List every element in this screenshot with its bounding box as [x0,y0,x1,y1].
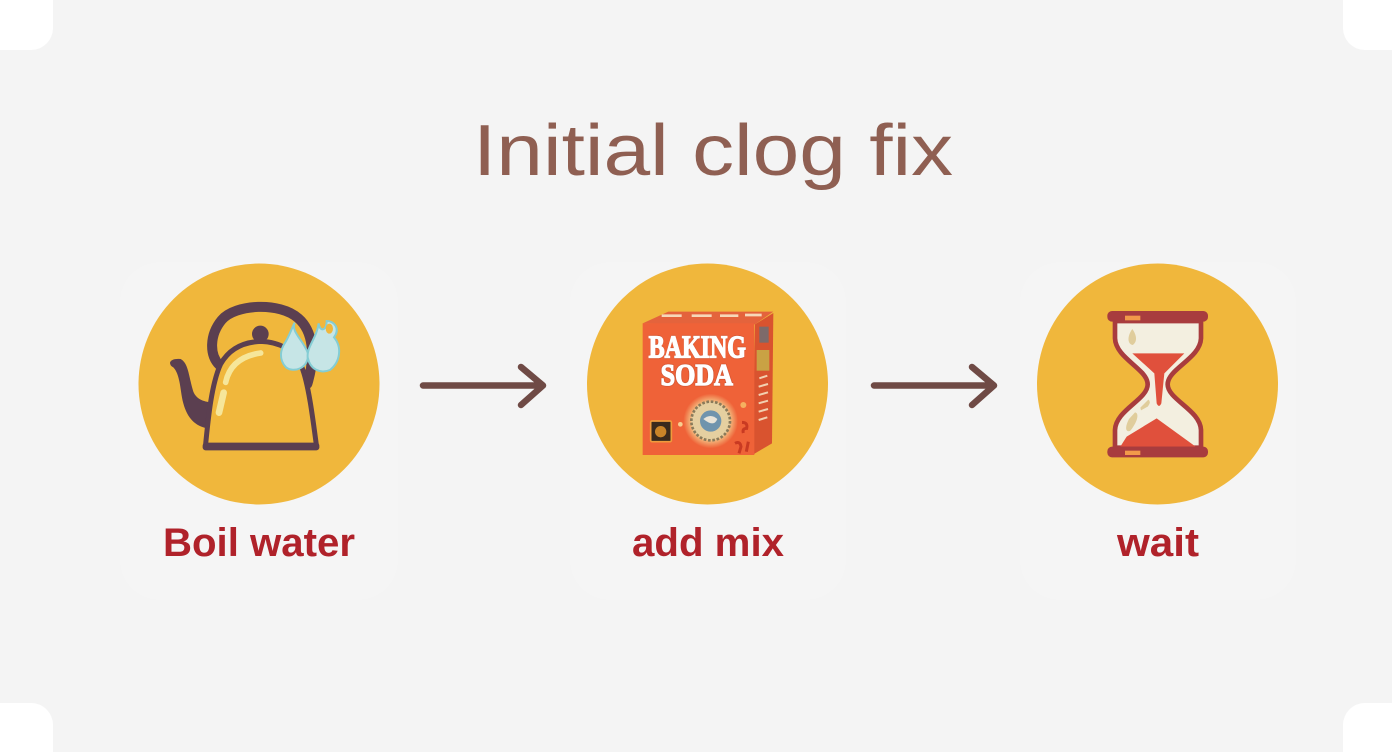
icon: hourglass [1107,311,1208,457]
box text: baking: BAKING [649,330,746,365]
box text: soda: SODA [661,358,733,393]
step 3 circle [1037,264,1278,504]
step 1 circle [138,264,380,504]
label: add mix: add mix [632,521,784,565]
step 3: wait [1037,264,1278,565]
step 2 circle [587,264,828,504]
label: boil water: Boil water [163,521,355,565]
title: Initial clog fix [473,110,953,191]
arrow 1 [423,367,543,405]
icon: baking soda box [643,312,773,455]
step 2: add mix [587,264,828,565]
step 1: boil water [138,264,380,565]
icon: kettle [170,307,339,450]
arrow 2 [874,367,994,405]
label: wait: wait [1116,521,1199,565]
